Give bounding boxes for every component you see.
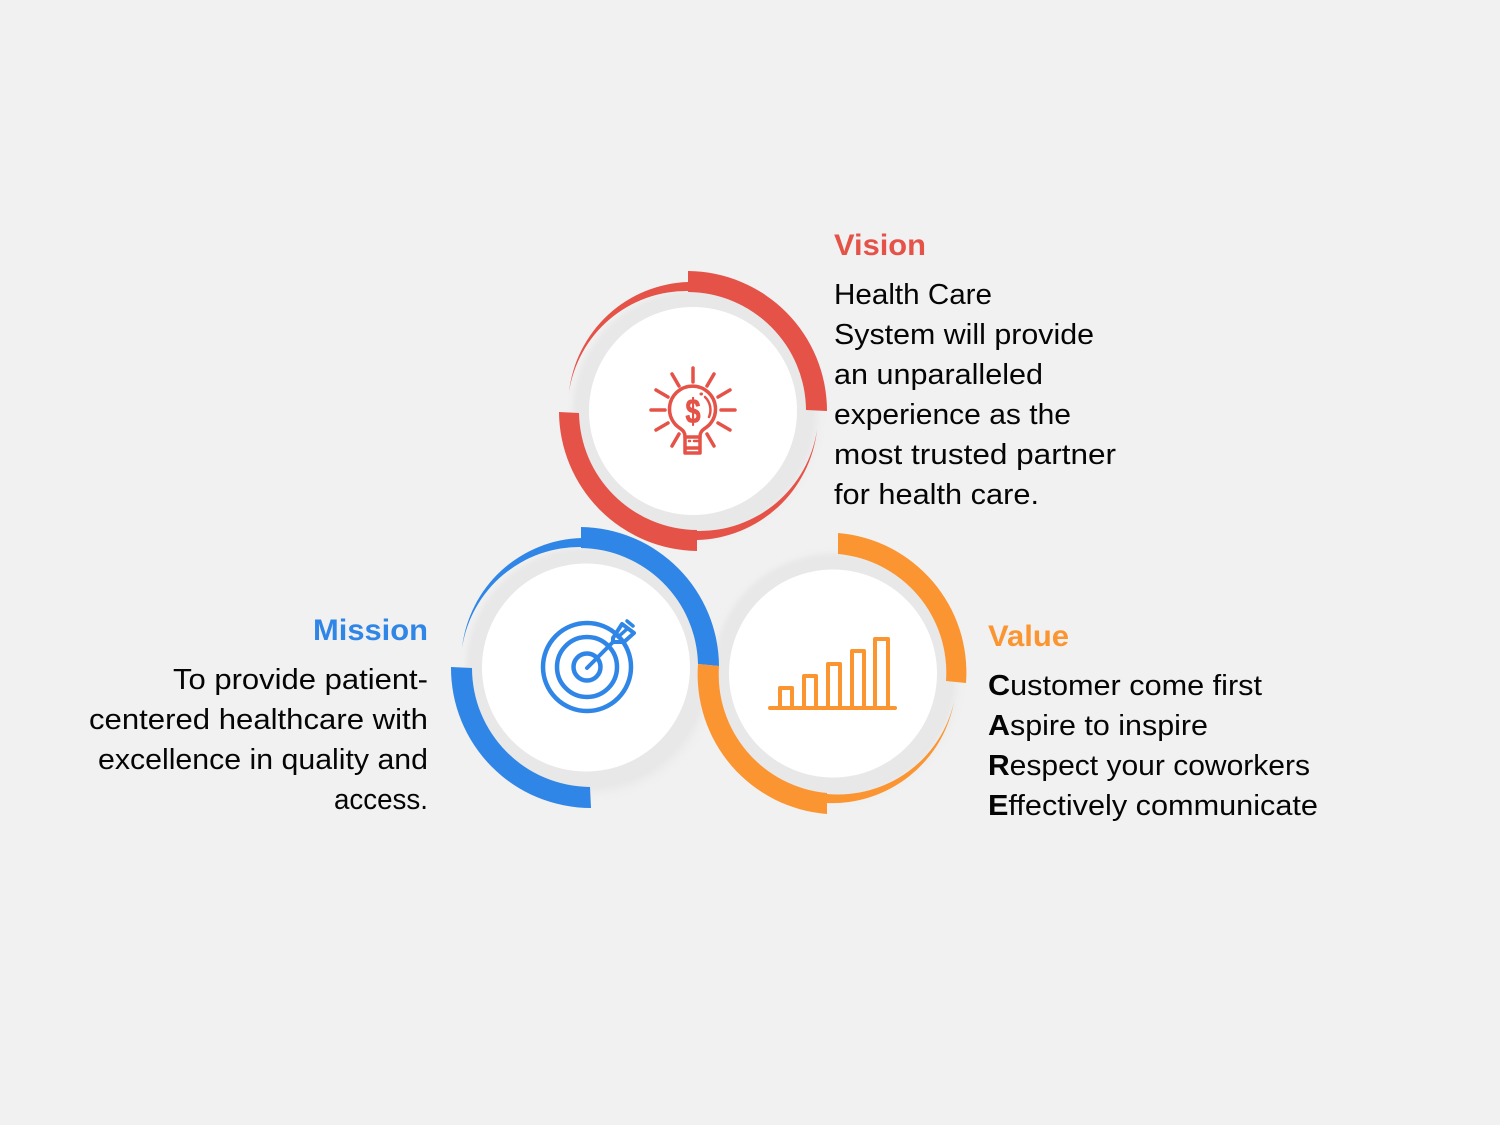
text block: mission: access.	[334, 784, 428, 816]
text block: vision: for health care.	[834, 479, 1039, 511]
icon: rising bar chart	[770, 639, 895, 708]
heading: Mission: Mission	[313, 614, 428, 647]
text block: value	[988, 670, 1318, 822]
icon: light bulb with dollar	[651, 368, 735, 453]
text block: mission	[89, 664, 428, 816]
text block: value: Effectively communicate	[988, 790, 1318, 822]
text block: vision: an unparalleled	[834, 359, 1043, 391]
text block: mission: To provide patient-	[173, 664, 428, 696]
text block: value: Aspire to inspire	[988, 710, 1208, 742]
text block: value: Respect your coworkers	[988, 750, 1310, 782]
text block: mission: excellence in quality and	[98, 744, 428, 776]
white discs	[482, 307, 937, 778]
icon: target with arrow	[543, 621, 634, 711]
text block: mission: centered healthcare with	[89, 704, 428, 736]
text block: value: Customer come first	[988, 670, 1262, 702]
blue ring arcs	[451, 527, 719, 808]
text block: vision: experience as the	[834, 399, 1071, 431]
orange ring arcs	[698, 533, 966, 814]
heading: Value: Value	[988, 620, 1069, 653]
icon: light bulb with dollar: $	[686, 393, 701, 431]
text block: vision: System will provide	[834, 319, 1094, 351]
ring shadows	[467, 292, 955, 796]
text block: vision	[834, 279, 1116, 511]
red ring arcs	[559, 271, 827, 551]
text block: vision: most trusted partner	[834, 439, 1116, 471]
text block: vision: Health Care	[834, 279, 992, 311]
heading: Vision: Vision	[834, 229, 926, 262]
